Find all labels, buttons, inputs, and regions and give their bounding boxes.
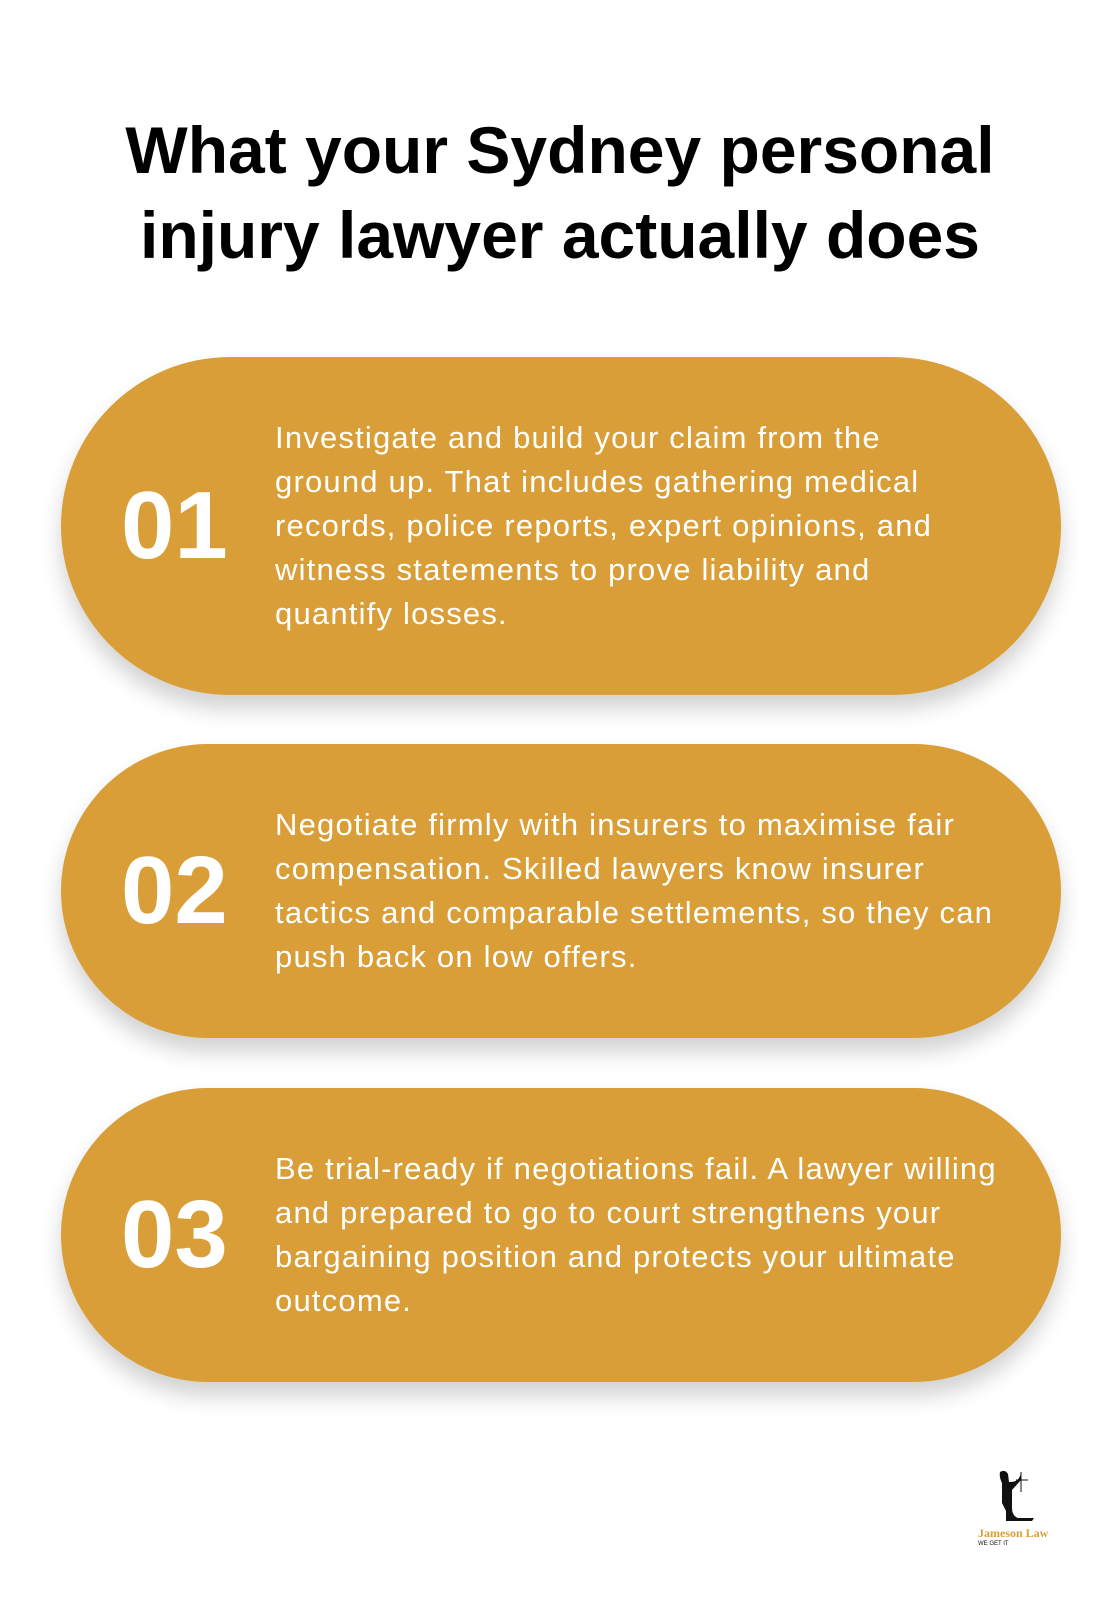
number 03: 03: [121, 1181, 228, 1288]
number 02: 02: [121, 837, 228, 944]
panel: step 02: [61, 744, 1061, 1038]
text 03: Be trial-ready if negotiations fail. A lawyer willing: [275, 1151, 997, 1186]
text 02: [275, 807, 993, 974]
panel: step 03: [61, 1088, 1061, 1382]
text 01: quantify losses.: [275, 596, 508, 631]
text 01: records, police reports, expert opinions, and: [275, 508, 932, 543]
text 02: tactics and comparable settlements, so they can: [275, 895, 993, 930]
title: injury lawyer actually does: [140, 198, 980, 272]
title: What your Sydney personal: [125, 113, 995, 187]
logo: [978, 1470, 1049, 1547]
text 02: Negotiate firmly with insurers to maximise fair: [275, 807, 955, 842]
number 01: 01: [121, 472, 228, 579]
text 03: bargaining position and protects your ultimate: [275, 1239, 956, 1274]
text 01: [275, 420, 932, 631]
text 03: outcome.: [275, 1283, 412, 1318]
text 02: push back on low offers.: [275, 939, 638, 974]
text 03: [275, 1151, 997, 1318]
text 02: compensation. Skilled lawyers know insurer: [275, 851, 925, 886]
text 01: Investigate and build your claim from the: [275, 420, 881, 455]
logo: Jameson Law: [978, 1526, 1049, 1540]
title: [125, 113, 995, 272]
logo: WE GET IT: [978, 1541, 1009, 1547]
text 01: ground up. That includes gathering medical: [275, 464, 919, 499]
text 03: and prepared to go to court strengthens your: [275, 1195, 941, 1230]
panel: step 01: [61, 357, 1061, 695]
text 01: witness statements to prove liability and: [275, 552, 870, 587]
